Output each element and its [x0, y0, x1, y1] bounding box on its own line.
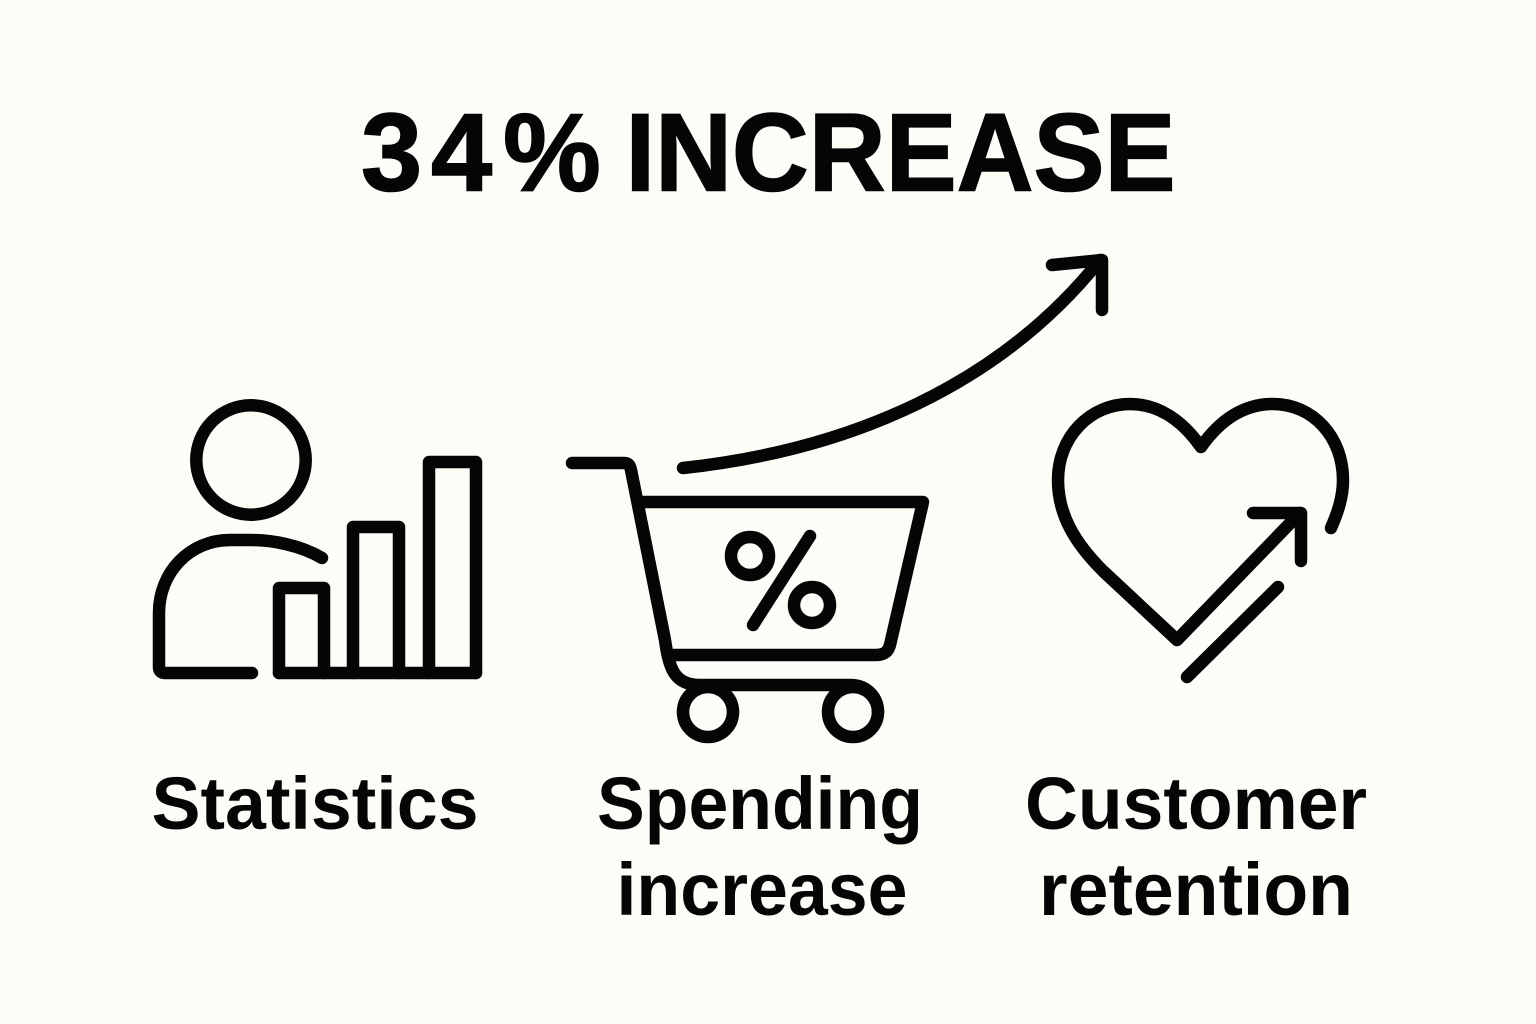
label: customer retention: Customer — [1025, 762, 1367, 845]
title: INCREASE — [626, 92, 1176, 214]
title — [361, 92, 1176, 214]
icon: shopping cart with percent — [572, 463, 923, 737]
label: statistics: Statistics — [152, 762, 478, 845]
label: spending increase: increase — [616, 848, 908, 931]
title: 34% — [361, 92, 601, 214]
label: customer retention: retention — [1039, 848, 1353, 931]
label: customer retention — [1025, 762, 1367, 931]
icon: heart with arrow — [1058, 404, 1343, 677]
label: spending increase: Spending — [597, 762, 923, 845]
label: spending increase — [597, 762, 923, 931]
icon: person with bar chart — [159, 405, 476, 673]
arrow: growth curve — [683, 260, 1102, 468]
